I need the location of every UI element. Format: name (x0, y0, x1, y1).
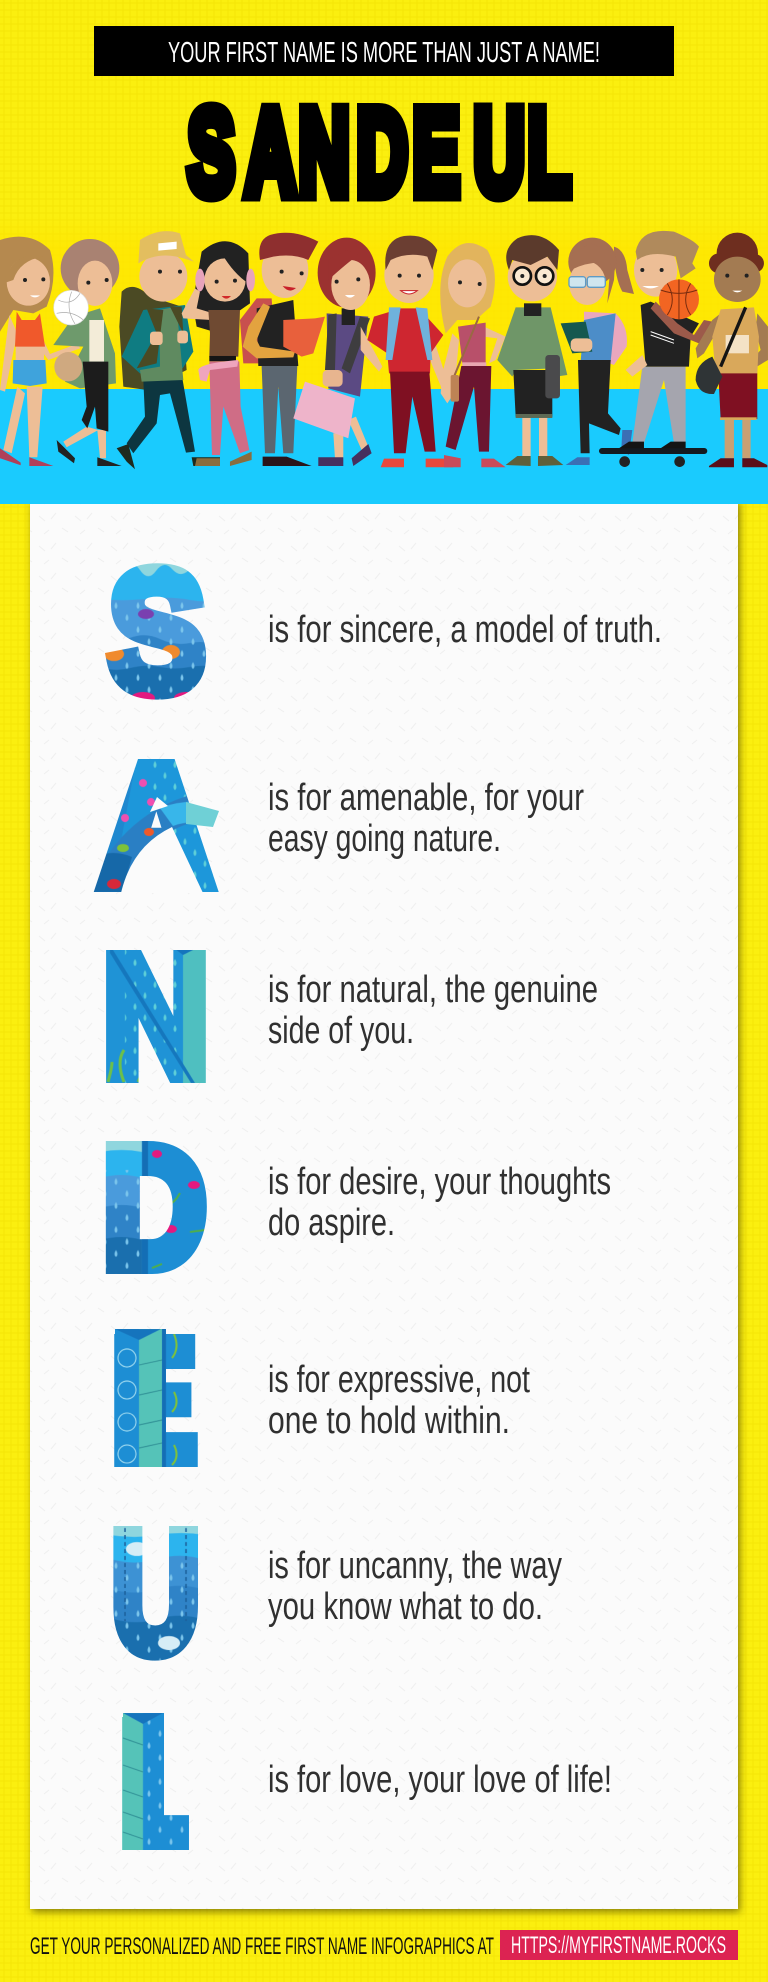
figure: girl with volleyball (53, 239, 122, 466)
letter row U (112, 1498, 562, 1688)
figure: boy in tan basketball tank with bag (696, 233, 768, 467)
letter row S (109, 537, 662, 727)
title: SANDEUL: SANDEUL (188, 85, 571, 221)
text: D lines: do aspire. (268, 1202, 395, 1244)
text: U lines (268, 1545, 562, 1628)
icon: patterned letter U: U (112, 1498, 200, 1688)
icon: patterned letter D: D (103, 1113, 206, 1303)
letter row E (112, 1305, 530, 1495)
warmer yellow behind the students (0, 215, 768, 390)
text: E lines: is for expressive, not (268, 1359, 530, 1401)
icon: patterned letter A: A (100, 732, 212, 921)
text: A lines: is for amenable, for your (268, 777, 584, 819)
text: A lines: easy going nature. (268, 818, 501, 860)
text: U lines: is for uncanny, the way (268, 1545, 562, 1587)
figure: boy with glasses and green sweater (497, 235, 567, 466)
text: E lines: one to hold within. (268, 1400, 510, 1442)
text: D lines (268, 1161, 611, 1244)
letter row N (103, 921, 598, 1111)
letter row D (103, 1113, 611, 1303)
figure: skater boy with basketball on skateboard (599, 231, 712, 467)
illustration: group of students, left half (0, 231, 376, 469)
figure: girl in orange top (0, 237, 80, 466)
text: N lines: is for natural, the genuine (268, 969, 598, 1011)
figure: girl with ponytail, tablet and pink backpack (561, 238, 634, 465)
panel: white card (30, 500, 738, 1909)
text: D lines: is for desire, your thoughts (268, 1161, 611, 1203)
figure: hiker with backpack and cap (117, 231, 220, 469)
figure: boy with red hair holding a book (240, 233, 325, 466)
text: S line: is for sincere, a model of truth. (268, 609, 662, 651)
icon: patterned letter E: E (112, 1305, 197, 1495)
footer call to action (30, 1930, 738, 1960)
icon: patterned letter S: S (109, 537, 205, 727)
text: N lines (268, 969, 598, 1052)
letter row A (100, 732, 584, 921)
icon: patterned letter N: N (103, 921, 209, 1111)
figure: girl with pink headphones (182, 241, 255, 466)
text: L line: is for love, your love of life! (268, 1759, 612, 1801)
text: A lines (268, 777, 584, 860)
blue floor band (0, 389, 768, 504)
figure: blonde girl with shoulder bag (440, 243, 506, 467)
header tagline (94, 26, 674, 76)
figure: boy in red shirt with backpack (361, 236, 453, 467)
icon: patterned letter L: L (120, 1689, 187, 1879)
figure: girl with red hair and pink bag (293, 238, 376, 466)
text: E lines (268, 1359, 530, 1442)
letter row L (120, 1689, 612, 1879)
text: U lines: you know what to do. (268, 1586, 543, 1628)
text: N lines: side of you. (268, 1010, 414, 1052)
illustration: group of students, right half (361, 231, 768, 467)
